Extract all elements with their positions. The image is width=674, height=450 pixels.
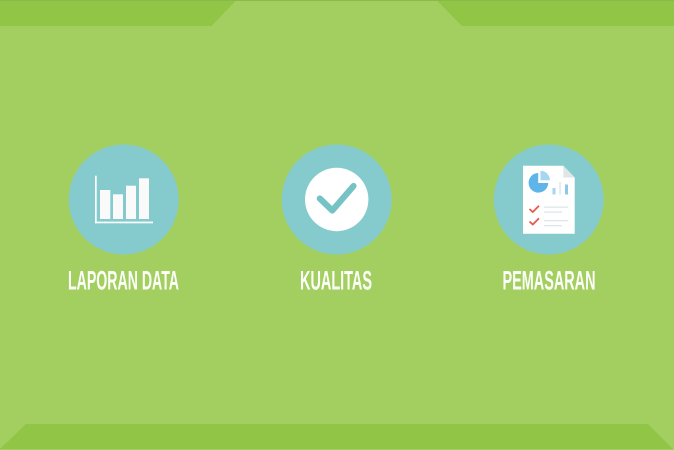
column: laporan data bbox=[68, 144, 179, 296]
label: kualitas: KUALITAS bbox=[300, 266, 372, 296]
label: pemasaran: PEMASARAN bbox=[502, 266, 596, 296]
top left dark band bbox=[0, 1, 236, 26]
icon: bar chart in circle bbox=[69, 144, 179, 254]
icon: report document in circle bbox=[494, 144, 604, 254]
label: laporan data: LAPORAN DATA bbox=[68, 266, 179, 296]
column: kualitas bbox=[282, 144, 392, 296]
icon: check mark in circle bbox=[282, 144, 392, 254]
column: pemasaran bbox=[494, 144, 604, 296]
top right dark band bbox=[438, 1, 674, 26]
bottom dark band bbox=[0, 424, 673, 449]
